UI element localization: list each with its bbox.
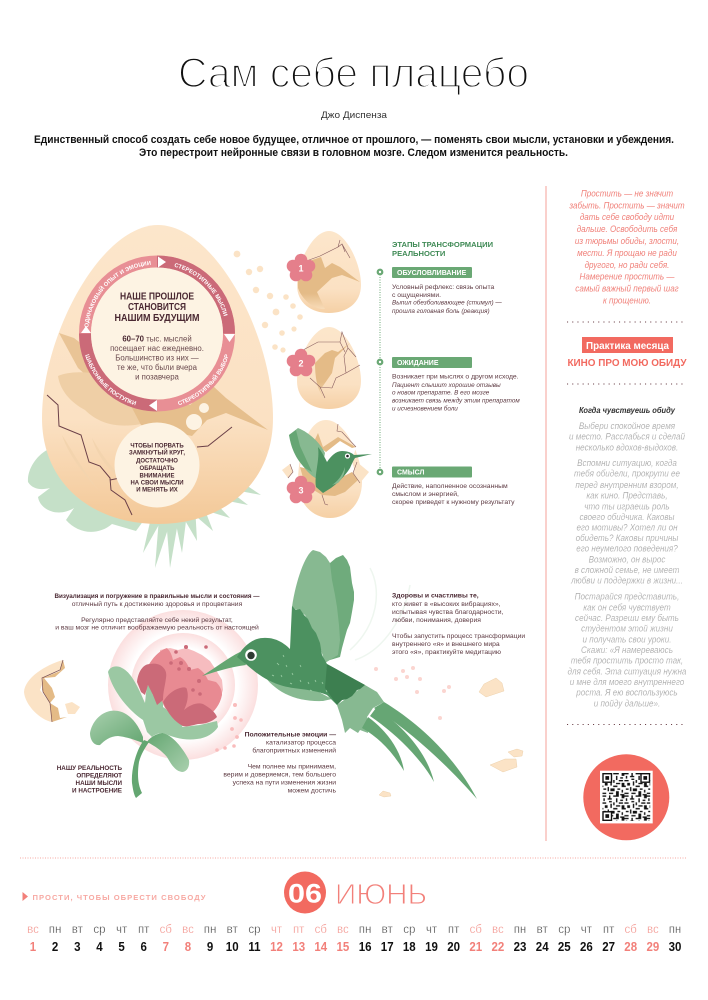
front wing (292, 550, 340, 663)
calendar dates: 7 (163, 939, 169, 954)
calendar weekdays: вс (647, 924, 659, 936)
feather marks (272, 655, 327, 692)
calendar dates: 1 (30, 939, 36, 954)
egg stage 1 (287, 231, 361, 313)
ring cycle: СТЕРЕОТИПНЫЕ МЫСЛИ (174, 263, 228, 316)
calendar dates: 22 (492, 939, 504, 954)
stage 2 text: ОЖИДАНИЕ (397, 360, 439, 367)
stages heading: ЭТАПЫ ТРАНСФОРМАЦИИ (392, 240, 493, 249)
stage 2 text (392, 357, 520, 413)
stage 1 text: с ощущениями. (392, 292, 441, 299)
practice text: его мотивы? Хотел ли он (576, 522, 678, 532)
practice text: перед внутренним взором, (575, 480, 679, 490)
stage 3 text: СМЫСЛ (397, 470, 425, 476)
calendar dates: 26 (580, 939, 593, 954)
stage 1 text: Выпил обезболивающее (стимул) — (392, 299, 502, 307)
practice text: как кино. Представь, (586, 490, 668, 501)
practice text: для себя. Эта ситуация нужна (568, 666, 687, 676)
health text: Чтобы запустить процесс трансформации (392, 632, 525, 640)
practice text: в сложной семье, не имеет (575, 565, 679, 575)
ring paragraph (110, 334, 204, 382)
calendar dates: 18 (403, 939, 416, 954)
calendar dates: 2 (52, 939, 58, 954)
calendar weekdays: ср (93, 924, 105, 936)
practice text: что ты играешь роль (584, 501, 670, 511)
visualization text: отличный путь к достижению здоровья и процветания (72, 600, 243, 608)
ring heading: НАШИМ БУДУЩИМ (114, 313, 200, 324)
calendar dates: 21 (469, 939, 482, 954)
ring heading (114, 292, 200, 324)
ring paragraph: посещает нас ежедневно. (110, 344, 204, 353)
health text: кто живет в «высоких вибрациях», (392, 600, 501, 608)
quote: дать себе свободу идти (580, 211, 674, 222)
big hummingbird (202, 550, 477, 799)
calendar dates: 8 (185, 939, 191, 954)
visualization text (54, 593, 260, 632)
practice text: несколько вдохов-выдохов. (576, 442, 678, 452)
ring cycle: ОДИНАКОВЫЙ ОПЫТ И ЭМОЦИИ (84, 260, 151, 327)
practice text: своего обидчика. Каковы (579, 512, 675, 522)
calendar weekdays: пт (138, 924, 150, 936)
calendar dates: 25 (558, 939, 571, 954)
reality caption: НАШИ МЫСЛИ (76, 780, 122, 787)
reality caption: И НАСТРОЕНИЕ (72, 787, 122, 794)
stages heading: РЕАЛЬНОСТИ (392, 249, 445, 258)
pollen dots (169, 645, 208, 696)
calendar dates: 5 (118, 939, 125, 954)
practice text: и получать свои уроки. (583, 634, 671, 644)
health text (392, 592, 525, 656)
calendar weekdays: сб (315, 924, 327, 936)
quote: Намерение простить — (580, 271, 675, 282)
quote (568, 188, 685, 306)
positive emotions text: верим и доверяемся, тем большего (223, 770, 336, 778)
reality caption: НАШУ РЕАЛЬНОСТЬ (57, 765, 122, 772)
practice text: Скажи: «Я намереваюсь (581, 645, 673, 655)
author: Джо Диспенза (321, 110, 388, 121)
eye (245, 649, 257, 661)
calendar weekdays: пн (49, 924, 61, 936)
calendar dates: 6 (141, 939, 147, 954)
practice text: и пойду дальше». (594, 698, 660, 708)
calendar weekdays: пт (448, 924, 460, 936)
calendar weekdays: чт (271, 924, 283, 936)
stage 2 text: возникает связь между этим препаратом (392, 397, 520, 405)
eggshell fragment left (24, 660, 80, 722)
calendar dates: 12 (270, 939, 283, 954)
health text: этого «я», практикуйте медитацию (392, 648, 501, 656)
calendar dates: 29 (647, 939, 659, 954)
practice text: и мне для моего внутреннего (570, 677, 684, 687)
practice badge (582, 337, 673, 353)
month theme: ПРОСТИ, ЧТОБЫ ОБРЕСТИ СВОБОДУ (32, 893, 206, 902)
stage 1 text: ОБУСЛОВЛИВАНИЕ (397, 270, 467, 277)
leaf: palm fronds (143, 473, 261, 568)
positive emotions text: успеха на пути изменения жизни (233, 779, 336, 786)
practice text: сейчас. Разреши ему быть (575, 613, 679, 623)
stage 3 text: смыслом и энергией, (392, 490, 459, 498)
ring cycle: СТЕРЕОТИПНЫЙ ВЫБОР (178, 354, 228, 405)
belly (262, 673, 332, 701)
stage 3 text: Действие, наполненное осознанным (392, 482, 508, 490)
callout circle: ДОСТАТОЧНО (136, 458, 178, 464)
stage 2 text: о новом препарате. В его мозге (392, 390, 490, 397)
lead paragraph (34, 134, 674, 159)
calendar weekdays: сб (160, 924, 172, 936)
ring heading: СТАНОВИТСЯ (128, 302, 186, 313)
health text: испытывая чувства благодарности, (392, 608, 503, 616)
calendar weekdays: пт (603, 924, 615, 936)
stage 1 text: прошла головная боль (реакция) (392, 307, 490, 315)
practice text: и место. Расслабься и сделай (569, 431, 685, 442)
practice text: Выбери спокойное время (579, 421, 676, 431)
footer dotted line (20, 857, 687, 859)
calendar weekdays: вс (182, 924, 194, 936)
month badge: 06 (288, 878, 322, 908)
calendar weekdays: вт (382, 924, 393, 936)
practice text: как он себя чувствует (583, 602, 671, 612)
title: Сам себе плацебо (178, 49, 529, 96)
body (237, 606, 365, 705)
calendar dates: 27 (602, 939, 615, 954)
flower head (137, 648, 223, 726)
practice title: КИНО ПРО МОЮ ОБИДУ (568, 358, 687, 369)
calendar weekdays: пт (293, 924, 305, 936)
positive emotions text: можем достичь (288, 787, 336, 794)
flower 3: 3 (298, 486, 304, 496)
stage 1 text: Условный рефлекс: связь опыта (392, 283, 495, 291)
month name: ИЮНЬ (335, 879, 427, 911)
positive emotions text (223, 731, 336, 794)
practice text: тебя простить просто так, (571, 655, 683, 666)
health text: любви, понимания, доверия (392, 616, 481, 624)
calendar weekdays: ср (248, 924, 260, 936)
positive emotions text: Чем полнее мы принимаем, (248, 763, 336, 770)
ring cycle: ШАБЛОННЫЕ ПОСТУПКИ (85, 354, 136, 406)
calendar dates: 3 (74, 939, 81, 954)
calendar dates: 10 (226, 939, 239, 954)
egg stage 3 with bird (282, 420, 372, 518)
ring paragraph: те же, что были вчера (117, 363, 198, 372)
practice text: его неумелого поведения? (576, 543, 678, 554)
practice text: студентом этой жизни (581, 623, 673, 634)
month badge (284, 872, 326, 914)
calendar dates: 16 (359, 939, 372, 954)
callout circle (114, 422, 200, 508)
flower 2: 2 (298, 358, 304, 368)
visualization text: и ваш мозг не отличит воображаемую реальность от настоящей (55, 624, 259, 632)
calendar weekdays: вс (337, 924, 349, 936)
calendar weekdays: пн (669, 924, 681, 936)
calendar dates: 13 (292, 939, 305, 954)
stage 2 text: Возникает при мыслях о другом исходе. (392, 373, 519, 380)
quote: самый важный первый шаг (575, 283, 679, 294)
egg stage 2 (287, 327, 361, 409)
ring paragraph: 60–70 тыс. мыслей (122, 334, 192, 344)
calendar weekdays: вт (72, 924, 84, 936)
callout circle: ВНИМАНИЕ (140, 474, 174, 480)
practice text: обидеть? Каковы причины (576, 533, 679, 543)
quote: из тюрьмы обиды, злости, (575, 235, 679, 246)
calendar weekdays: вт (537, 924, 548, 936)
practice badge: Практика месяца (586, 341, 669, 352)
quote: к прощению. (603, 295, 651, 306)
stage 1 text (392, 267, 502, 315)
calendar weekdays: вт (227, 924, 238, 936)
practice text: Постарайся представить, (575, 591, 679, 602)
bird small (289, 428, 372, 493)
stage 2 text: Пациент слышит хорошие отзывы (392, 382, 501, 389)
callout circle: НА СВОИ МЫСЛИ (130, 481, 184, 487)
calendar weekdays: сб (470, 924, 482, 936)
calendar dates: 20 (447, 939, 460, 954)
calendar weekdays: чт (426, 924, 438, 936)
practice text: Возможно, он вырос (589, 554, 666, 564)
decorative dots (234, 251, 303, 353)
quote: дальше. Освободить себя (577, 223, 678, 234)
egg shell (42, 225, 273, 524)
health text: внутреннего «я» и внешнего мира (392, 641, 500, 648)
calendar weekdays: пн (514, 924, 526, 936)
calendar dates: 17 (381, 939, 394, 954)
calendar dates: 23 (514, 939, 526, 954)
ring heading: НАШЕ ПРОШЛОЕ (120, 292, 194, 302)
calendar dates: 9 (207, 939, 213, 954)
calendar weekdays: чт (581, 924, 593, 936)
quote: забыть. Простить — значит (568, 200, 685, 210)
visualization text: Визуализация и погружение в правильные мысли и состояния — (54, 593, 260, 600)
calendar dates: 15 (337, 939, 349, 954)
clover flower (90, 610, 258, 798)
quote: Простить — не значит (581, 188, 673, 199)
flower 1: 1 (298, 264, 304, 274)
visualization text: Регулярно представляйте себе некий результат, (81, 616, 233, 624)
positive emotions text: благоприятных изменений (252, 746, 336, 754)
cracks (47, 395, 132, 515)
QR code (583, 754, 669, 840)
ring cycle (79, 256, 235, 412)
calendar dates (30, 939, 681, 954)
calendar dates: 28 (624, 939, 637, 954)
glow rings (108, 610, 258, 760)
callout circle: ЗАМКНУТЫЙ КРУГ, (129, 448, 185, 456)
beak (202, 652, 246, 676)
quote: мести. Я прощаю не ради (577, 247, 677, 258)
eggshell fragments right (379, 678, 523, 797)
calendar weekdays: ср (403, 924, 415, 936)
positive emotions text: Положительные эмоции — (245, 731, 336, 738)
calendar weekdays: сб (625, 924, 637, 936)
calendar weekdays (27, 924, 681, 936)
leaf: monstera (28, 450, 144, 532)
calendar dates: 30 (669, 939, 681, 954)
long tail feathers (362, 702, 477, 799)
right column rule (545, 186, 547, 841)
tail (337, 685, 384, 733)
callout circle: ОБРАЩАТЬ (140, 466, 175, 472)
calendar dates: 14 (314, 939, 327, 954)
calendar dates: 24 (536, 939, 549, 954)
stages timeline (378, 270, 382, 474)
callout circle: ЧТОБЫ ПОРВАТЬ (130, 444, 184, 450)
calendar weekdays: ср (558, 924, 570, 936)
reality caption (57, 765, 122, 794)
calendar weekdays: пн (204, 924, 216, 936)
calendar dates: 11 (248, 939, 261, 954)
pink dots near flower (215, 703, 243, 752)
practice text: роста. Я ею воспользуюсь (575, 687, 678, 698)
illustration: big egg with ring (28, 225, 273, 568)
quote: другого, но ради себя. (585, 259, 669, 270)
health text: Здоровы и счастливы те, (392, 592, 479, 600)
callout circle: И МЕНЯТЬ ИХ (136, 488, 178, 494)
ring paragraph: Большинство из них — (115, 354, 199, 362)
pink dots right (374, 666, 451, 720)
calendar weekdays: чт (116, 924, 128, 936)
stage 2 text: и исчезновением боли (392, 405, 458, 413)
practice heading: Когда чувствуешь обиду (579, 405, 676, 415)
reality caption: ОПРЕДЕЛЯЮТ (76, 773, 122, 780)
stage 3 text: скорее приведет к нужному результату (392, 499, 515, 506)
practice text: тебя обидели, прокрути ее (574, 468, 680, 479)
calendar weekdays: вс (492, 924, 504, 936)
calendar weekdays: вс (27, 924, 39, 936)
ring paragraph: и позавчера (135, 372, 180, 382)
faint arcs (350, 568, 410, 660)
practice text: любви и поддержки в жизни... (570, 575, 683, 586)
stage 3 text (392, 466, 515, 506)
lead paragraph: Это перестроит нейронные связи в головном мозге. Следом изменится реальность. (139, 147, 568, 159)
calendar dates: 4 (96, 939, 103, 954)
practice text: Вспомни ситуацию, когда (577, 458, 677, 468)
thought bubbles (186, 403, 209, 430)
stages heading (392, 240, 493, 258)
calendar dates: 19 (425, 939, 438, 954)
calendar weekdays: пн (359, 924, 371, 936)
back wing (330, 555, 354, 660)
stem and leaves (90, 666, 218, 798)
positive emotions text: катализатор процесса (266, 739, 336, 746)
bird silhouette in egg (58, 333, 268, 498)
practice text (568, 421, 687, 708)
